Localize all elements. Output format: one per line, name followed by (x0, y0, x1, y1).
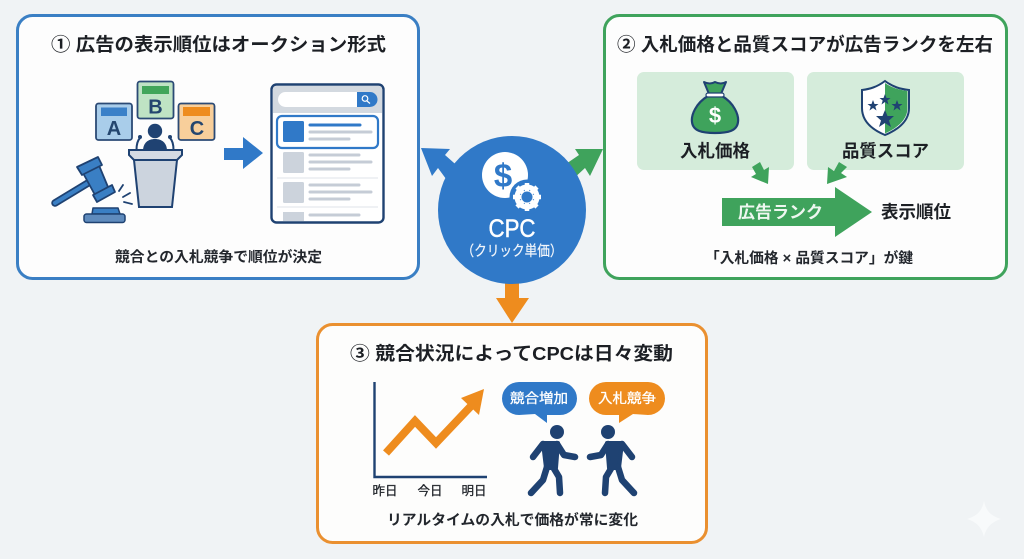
label: bid price: 入札価格 (680, 141, 750, 161)
chart: rising trend line (372, 382, 487, 498)
icon: dollar coin and gear: $ (494, 157, 512, 194)
arrow: ad rank: 広告ランク (738, 203, 823, 222)
label: display rank: 表示順位 (881, 202, 951, 222)
icon: bid cards A B C (96, 82, 214, 140)
icon: bid cards A B C: C (190, 118, 204, 140)
icon: bid cards A B C: A (107, 118, 121, 140)
icon: gavel (55, 157, 132, 222)
icon: bid cards A B C: B (148, 96, 163, 118)
label: cost per click: （クリック単価） (462, 243, 562, 260)
axis labels: 昨日 (372, 484, 398, 498)
speech bubble: bidding war: 入札競争 (598, 391, 656, 406)
caption: panel 3: リアルタイムの入札で価格が常に変化 (387, 511, 638, 529)
heading: panel 2: ② 入札価格と品質スコアが広告ランクを左右 (617, 34, 993, 55)
panel: bid and quality score (604, 16, 1006, 278)
arrow: bid to rank (751, 162, 769, 184)
icon: sparkle watermark (967, 501, 1001, 537)
label: quality score: 品質スコア (842, 141, 929, 161)
icon: speaker at podium (129, 124, 182, 207)
arrow: auction to results (224, 137, 263, 169)
arrow: quality to rank (827, 162, 847, 184)
heading: panel 3: ③ 競合状況によってCPCは日々変動 (350, 343, 673, 364)
panel: auction format (18, 16, 418, 278)
arrow: CPC to panel 3 (496, 280, 529, 323)
axis labels (372, 483, 487, 498)
icon: money bag (692, 82, 738, 133)
panel: daily fluctuation (318, 324, 706, 542)
icon: money bag: $ (709, 103, 721, 128)
caption: panel 1: 競合との入札競争で順位が決定 (115, 248, 322, 266)
label: CPC: CPC (488, 215, 536, 243)
heading: panel 1: ① 広告の表示順位はオークション形式 (51, 34, 387, 55)
icon: dollar coin and gear (482, 152, 544, 214)
speech bubble: more competitors (502, 382, 577, 423)
tile: bid price (637, 72, 794, 170)
tile: quality score (807, 72, 964, 170)
axis labels: 明日 (461, 484, 487, 498)
icon: search results browser (272, 84, 384, 222)
speech bubble: bidding war (589, 382, 665, 423)
arrow: CPC to panel 2 (560, 149, 603, 180)
arrow: ad rank (722, 187, 872, 237)
speech bubble: more competitors: 競合増加 (510, 391, 568, 406)
icon: two people (531, 425, 634, 493)
icon: shield with stars (862, 81, 909, 135)
arrow: CPC to panel 1 (421, 148, 462, 183)
axis labels: 今日 (417, 483, 443, 498)
caption: panel 2: 「入札価格 × 品質スコア」が鍵 (705, 249, 913, 267)
central circle: CPC (438, 136, 586, 284)
